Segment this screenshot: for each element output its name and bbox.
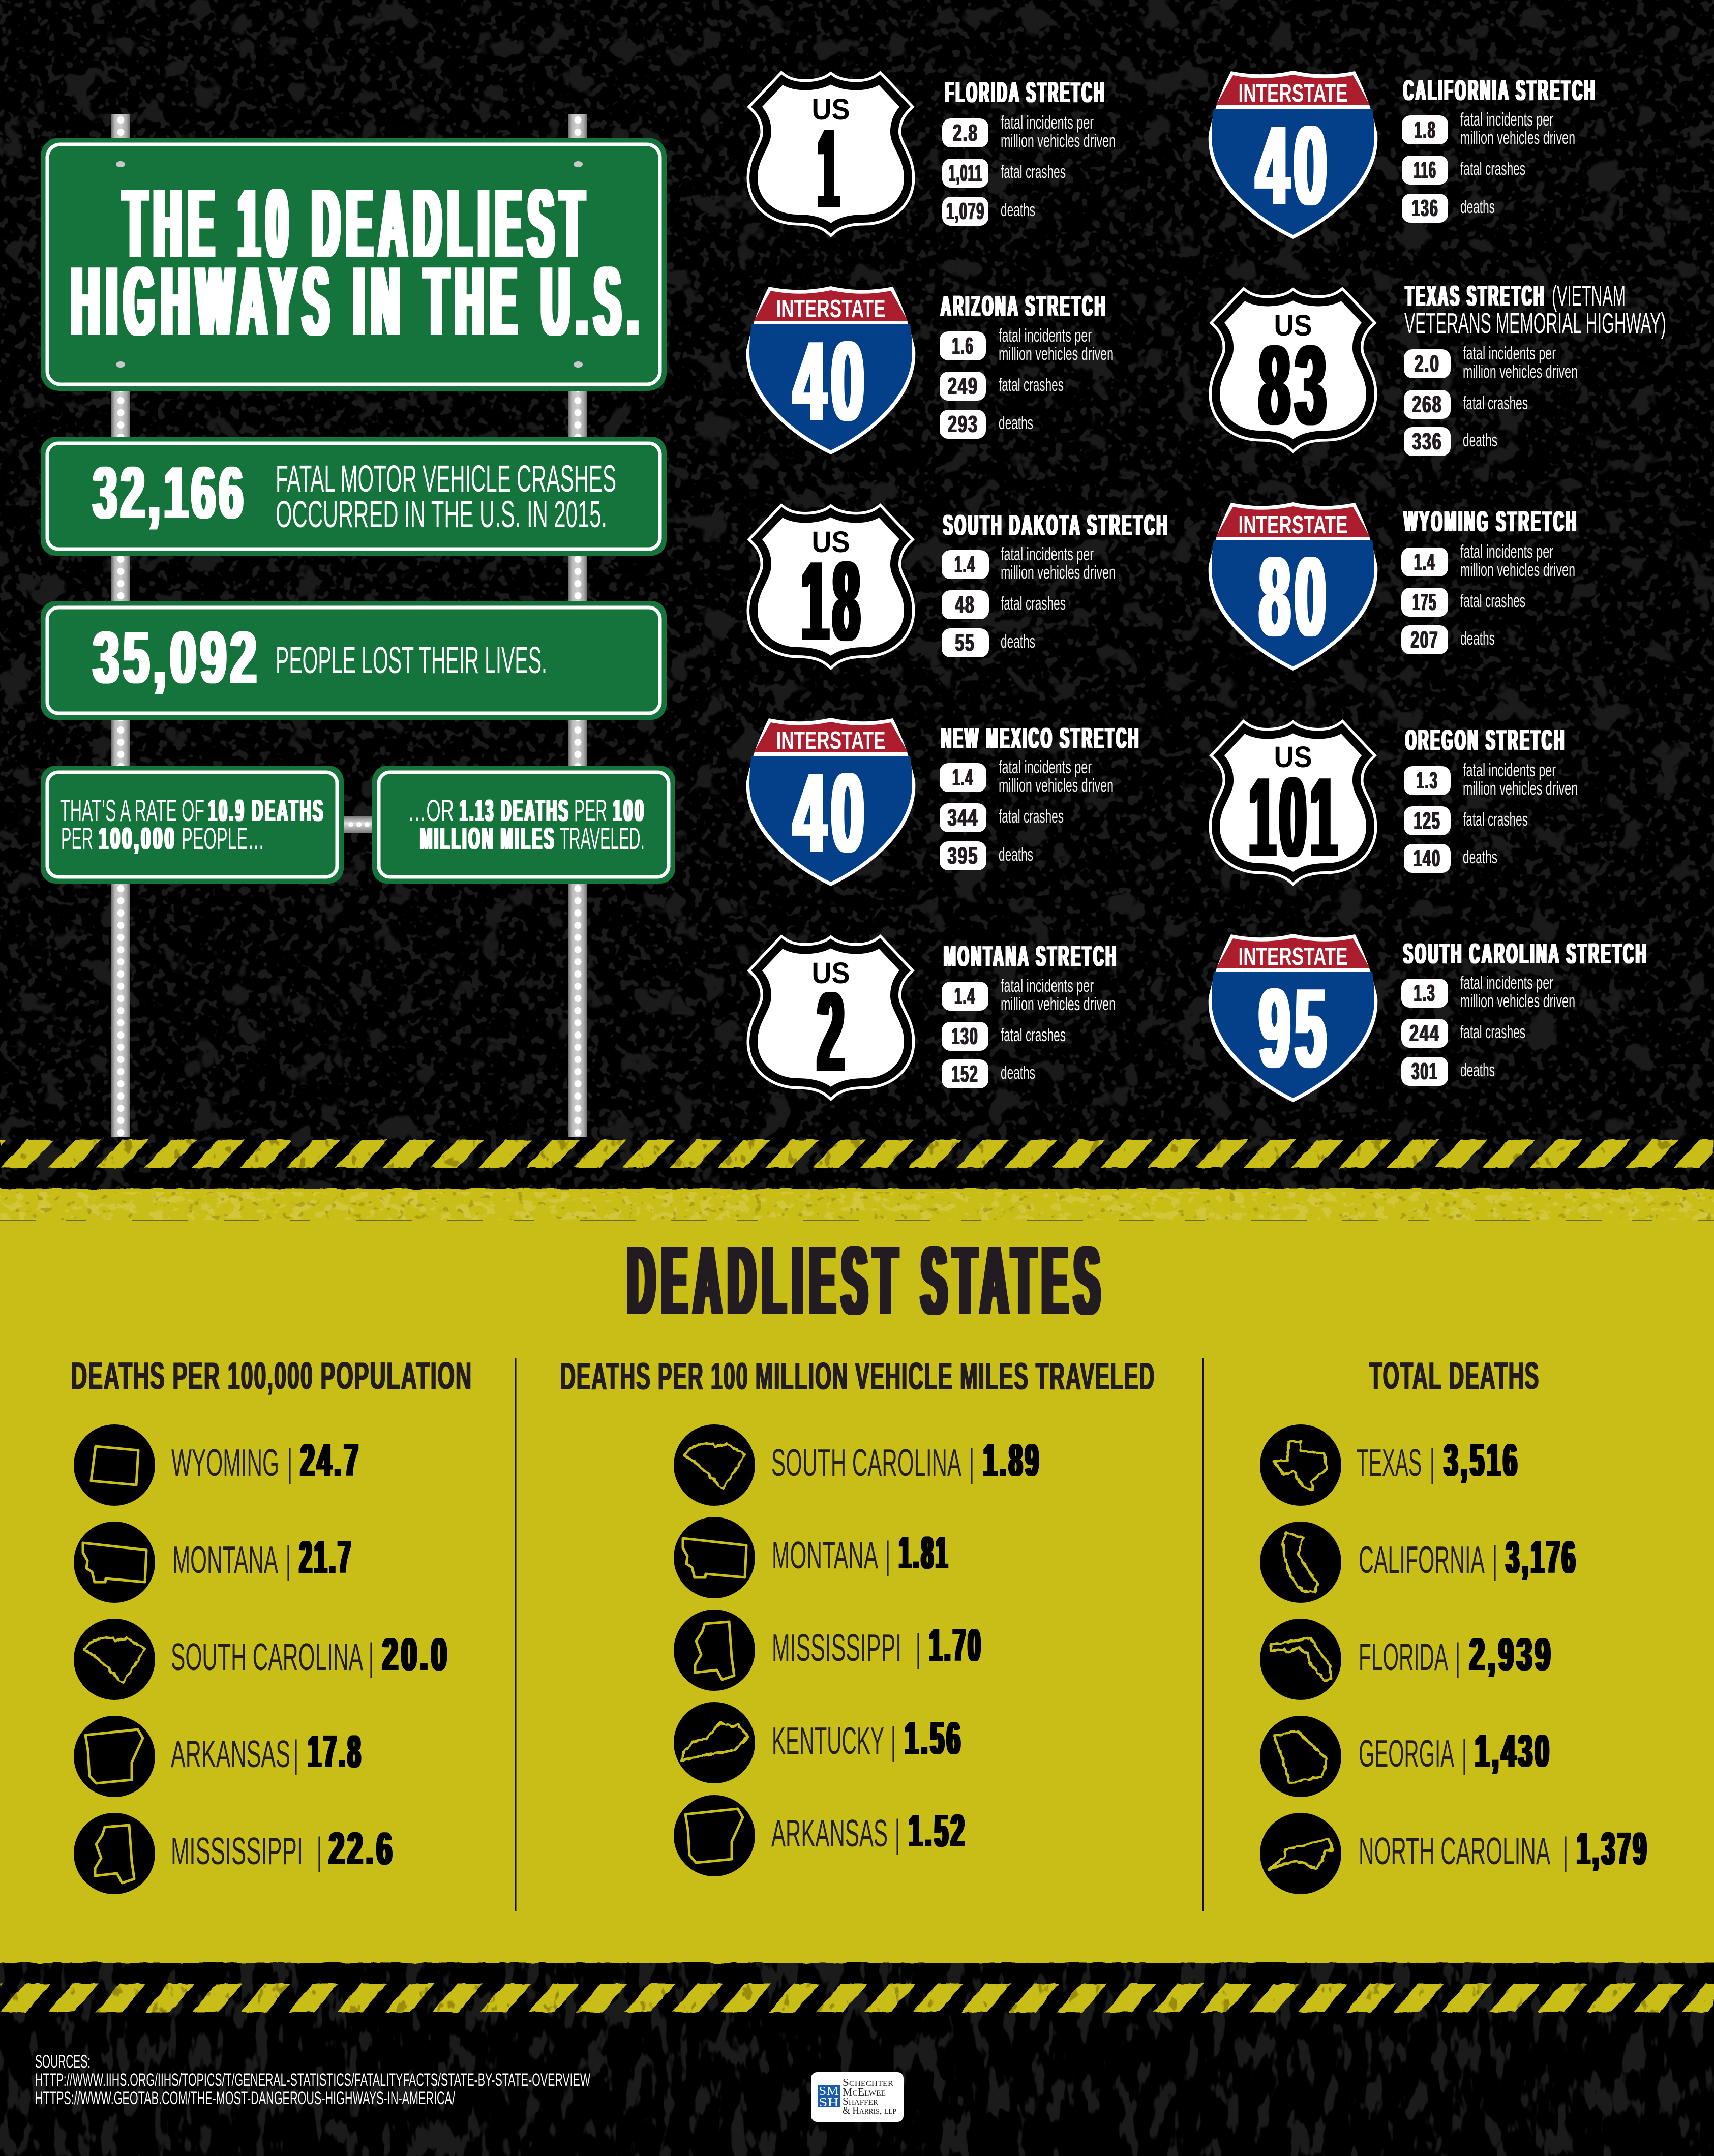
stats: 2.0 — [1415, 350, 1440, 377]
text: MONTANA STRETCH — [944, 940, 1118, 973]
shield: I-95: 95 — [1259, 965, 1331, 1091]
divider right — [1202, 1358, 1204, 1911]
logo: Schechter McElwee Shaffer & Harris: Schechter — [843, 2076, 893, 2088]
stats: 130 — [952, 1023, 978, 1049]
stats: million vehicles driven — [1460, 127, 1575, 148]
sign post: left — [111, 114, 130, 1137]
row: South Carolina — [74, 1619, 450, 1700]
row: Texas — [1260, 1424, 1520, 1506]
shield: US 1 — [754, 80, 908, 232]
stats: 140 — [1414, 845, 1441, 871]
stats — [942, 975, 1116, 1088]
column: total deaths — [1260, 1354, 1649, 1894]
stats: fatal crashes — [999, 374, 1064, 395]
row: Georgia: 1,430 — [1475, 1726, 1552, 1777]
miles text: 1.13 DEATHS — [460, 794, 570, 828]
column: deaths per 100 million vehicle miles traveled — [560, 1355, 1155, 1876]
stats: fatal incidents per — [1463, 343, 1556, 363]
row: Mississippi: | — [916, 1626, 921, 1669]
crashes number: 32,166 — [93, 451, 247, 534]
row: Arkansas: ARKANSAS — [771, 1812, 888, 1855]
stats: 301 — [1411, 1058, 1438, 1084]
stats — [1404, 343, 1578, 456]
stats — [940, 325, 1114, 439]
shield: I-40 — [1209, 71, 1377, 239]
row: Montana: MONTANA — [772, 1534, 878, 1576]
sign post: right — [568, 114, 587, 1137]
highway: I-40 New Mexico — [746, 718, 1140, 886]
stats: deaths — [1460, 196, 1495, 217]
shield: US 1: US — [811, 93, 850, 126]
small sign: rate per population: 10.9 DEATHS — [208, 794, 325, 828]
highway: I-40 Arizona — [746, 286, 1114, 454]
row: North Carolina: | — [1563, 1830, 1568, 1872]
stats: million vehicles driven — [1463, 361, 1578, 382]
shield: US 83 — [1216, 296, 1370, 448]
stats: 207 — [1410, 626, 1439, 653]
stats: fatal incidents per — [1463, 760, 1556, 780]
row: Arkansas: 17.8 — [308, 1726, 363, 1777]
row: Wyoming: WYOMING — [171, 1441, 279, 1484]
row: Arkansas: | — [293, 1733, 298, 1775]
row: California: 3,176 — [1506, 1532, 1578, 1583]
stats: 344 — [948, 804, 978, 831]
row: Mississippi — [674, 1610, 983, 1691]
sources: HTTP://WWW.IIHS.ORG/IIHS/TOPICS/T/GENERAL-STATISTICS/FATALITYFACTS/STATE-BY-STATE-OVERVIEW — [35, 2070, 590, 2090]
row: Montana — [674, 1517, 950, 1598]
highway: US 101 Oregon — [1216, 724, 1578, 880]
row: South Carolina: | — [369, 1635, 374, 1678]
stats: 249 — [948, 373, 978, 399]
row: Texas: TEXAS — [1357, 1441, 1422, 1484]
stats: 1.4 — [1414, 549, 1435, 575]
stats: fatal incidents per — [1460, 972, 1553, 993]
stats: 55 — [955, 629, 975, 656]
shield: I-40 — [746, 286, 915, 454]
stats: fatal crashes — [1463, 809, 1528, 830]
row: Georgia: | — [1462, 1732, 1467, 1775]
stats: deaths — [999, 412, 1033, 433]
shield: I-40: 40 — [1256, 103, 1332, 229]
row: Florida: FLORIDA — [1359, 1635, 1448, 1678]
column: deaths per 100 million vehicle miles traveled: 1.81 — [899, 1528, 950, 1578]
shield: I-40: INTERSTATE — [776, 295, 886, 323]
row: Mississippi: | — [317, 1830, 322, 1872]
stats: million vehicles driven — [1463, 778, 1578, 799]
shield: US 101 — [1216, 728, 1370, 880]
stats: fatal crashes — [999, 806, 1064, 827]
stats: 48 — [955, 591, 975, 618]
hazard stripes: bottom — [0, 1984, 1714, 2012]
highway: I-80 Wyoming — [1209, 502, 1578, 671]
stats: 2.8 — [953, 119, 978, 146]
shield: I-40: 40 — [793, 750, 869, 876]
stats: fatal crashes — [1460, 590, 1525, 611]
stats: fatal crashes — [1460, 1021, 1525, 1042]
stats: 1,011 — [949, 160, 982, 186]
column heading: TOTAL DEATHS — [1369, 1354, 1540, 1397]
highway: I-95 South Carolina — [1209, 934, 1648, 1102]
row: Georgia: GEORGIA — [1359, 1732, 1454, 1775]
row: South Carolina: | — [969, 1441, 974, 1484]
heading — [1404, 280, 1666, 340]
row: Arkansas: ARKANSAS — [171, 1733, 290, 1775]
row: Texas: 3,516 — [1444, 1435, 1520, 1486]
stats: 1.4 — [954, 983, 976, 1009]
stats: million vehicles driven — [1460, 559, 1575, 580]
shield: US 2: 2 — [818, 969, 844, 1095]
yellow panel: deadliest states — [0, 1189, 1714, 1963]
small sign: rate per miles — [372, 766, 675, 884]
column heading: DEATHS PER 100,000 POPULATION — [71, 1354, 472, 1397]
row: Kentucky: | — [891, 1719, 896, 1762]
highway: US 83 Texas — [1216, 280, 1666, 456]
row: Arkansas: | — [895, 1812, 900, 1855]
stats: 1.8 — [1415, 116, 1436, 143]
stats: fatal incidents per — [1460, 109, 1553, 130]
highway: US 2 Montana — [754, 940, 1118, 1095]
row: North Carolina: 1,379 — [1577, 1824, 1649, 1874]
row: Kentucky — [674, 1702, 963, 1783]
stats — [942, 543, 1116, 657]
column: deaths per 100,000 population: 21.7 — [299, 1532, 353, 1583]
shield: US 1: 1 — [818, 106, 838, 232]
shield: I-95: INTERSTATE — [1239, 943, 1347, 970]
row: Kentucky: KENTUCKY — [772, 1719, 884, 1762]
stats: fatal incidents per — [1460, 541, 1553, 562]
rate text: PER — [61, 822, 93, 856]
stats: deaths — [1463, 430, 1497, 450]
stats: million vehicles driven — [999, 775, 1114, 796]
miles text: 100 — [613, 794, 646, 828]
sources: SOURCES: — [35, 2052, 91, 2072]
stats: fatal crashes — [1001, 593, 1066, 614]
shield: US 83: US — [1274, 309, 1312, 342]
stats — [942, 112, 1116, 226]
row: Mississippi: 22.6 — [329, 1824, 395, 1874]
stats: deaths — [1001, 199, 1035, 220]
stats: fatal crashes — [1460, 158, 1525, 179]
row: Arkansas — [74, 1716, 363, 1797]
column: deaths per 100 million vehicle miles traveled: 1.70 — [929, 1620, 983, 1671]
heading: TEXAS STRETCH — [1405, 280, 1546, 312]
row: Montana — [74, 1522, 353, 1603]
row: California — [1260, 1522, 1578, 1603]
stat sign: crashes — [41, 437, 667, 556]
stats: deaths — [1460, 1059, 1495, 1080]
row: South Carolina — [674, 1424, 1041, 1506]
stats: 395 — [948, 842, 978, 869]
stats: 136 — [1411, 195, 1439, 221]
stats: million vehicles driven — [1001, 130, 1116, 151]
column heading: DEATHS PER 100 MILLION VEHICLE MILES TRAVELED — [560, 1355, 1155, 1398]
logo: Schechter McElwee Shaffer & Harris — [811, 2072, 904, 2122]
highway: US 18 South Dakota — [754, 509, 1169, 664]
connector bar between small signs — [341, 816, 376, 833]
stats: deaths — [1463, 846, 1497, 867]
row: Mississippi — [74, 1813, 395, 1894]
stats: deaths — [1460, 628, 1495, 649]
row: Wyoming: 24.7 — [300, 1435, 361, 1486]
stats: fatal incidents per — [999, 756, 1092, 777]
row: South Carolina: SOUTH CAROLINA — [171, 1635, 363, 1678]
highway: I-40 Arizona: ARIZONA STRETCH — [941, 290, 1107, 322]
text: NEW MEXICO STRETCH — [941, 722, 1140, 754]
row: Florida: 2,939 — [1469, 1629, 1553, 1680]
shield: US 2: US — [811, 957, 850, 990]
crashes description: FATAL MOTOR VEHICLE CRASHES — [276, 458, 616, 500]
row: Montana: | — [885, 1534, 890, 1576]
main title sign — [41, 138, 667, 391]
logo: Schechter McElwee Shaffer & Harris: SM — [819, 2085, 839, 2098]
stats: fatal crashes — [1463, 392, 1528, 413]
stats: million vehicles driven — [999, 343, 1114, 364]
stats: fatal incidents per — [1001, 543, 1094, 564]
miles text: PER — [574, 794, 607, 828]
stats: 268 — [1412, 391, 1442, 417]
logo: Schechter McElwee Shaffer & Harris: SH — [819, 2096, 839, 2109]
stats: fatal incidents per — [1001, 975, 1094, 996]
stats: 293 — [948, 411, 978, 437]
stats: 152 — [952, 1060, 978, 1087]
shield: I-40: 40 — [793, 318, 869, 444]
stat sign: deaths — [41, 601, 667, 720]
row: South Carolina: 20.0 — [382, 1629, 450, 1680]
shield: I-80: INTERSTATE — [1239, 511, 1347, 539]
row: Arkansas: 1.52 — [909, 1806, 967, 1857]
row: California: | — [1492, 1538, 1497, 1581]
shield: US 2 — [754, 944, 908, 1095]
shield: I-40 — [746, 718, 915, 886]
row: Mississippi: MISSISSIPPI — [171, 1830, 303, 1872]
stats — [940, 756, 1114, 870]
row: Arkansas — [674, 1795, 967, 1876]
text: THE 10 DEADLIEST — [124, 168, 591, 278]
row: Wyoming: | — [287, 1441, 292, 1484]
stats: 1.3 — [1417, 767, 1438, 794]
miles text: MILLION MILES — [420, 822, 556, 856]
stats: deaths — [1001, 1062, 1035, 1083]
miles text: TRAVELED. — [560, 822, 645, 856]
crashes description: OCCURRED IN THE U.S. IN 2015. — [276, 493, 607, 535]
shield: US 83: 83 — [1259, 322, 1331, 448]
stats: 1.3 — [1414, 980, 1436, 1006]
row: Texas: | — [1430, 1441, 1435, 1484]
rate text: 100,000 — [99, 822, 176, 856]
shield: I-95 — [1209, 934, 1377, 1102]
hazard stripes: top — [0, 1140, 1714, 1168]
row: Montana: MONTANA — [172, 1538, 278, 1581]
row: Georgia — [1260, 1716, 1552, 1797]
stats: deaths — [1001, 631, 1035, 652]
stats: fatal incidents per — [999, 325, 1092, 346]
stats: 116 — [1414, 157, 1437, 183]
logo: Schechter McElwee Shaffer & Harris: & Harris, llp — [843, 2104, 896, 2116]
stats: 244 — [1409, 1020, 1440, 1046]
row: Montana: | — [286, 1538, 291, 1581]
stats: million vehicles driven — [1460, 990, 1575, 1011]
row: California: CALIFORNIA — [1359, 1538, 1485, 1581]
highway: US 1 Florida — [754, 76, 1116, 232]
row: Mississippi: MISSISSIPPI — [772, 1626, 901, 1669]
stats: 1.4 — [954, 551, 976, 578]
stats — [1401, 541, 1575, 654]
shield: US 18: US — [811, 526, 850, 559]
deaths number: 35,092 — [93, 616, 260, 699]
logo: Schechter McElwee Shaffer & Harris: McElwee — [843, 2086, 886, 2098]
stats: deaths — [999, 844, 1033, 865]
stats — [1404, 760, 1578, 873]
rate text: THAT’S A RATE OF — [60, 794, 204, 828]
row: Florida: | — [1455, 1635, 1460, 1678]
miles text: …OR — [408, 794, 454, 828]
stats — [1402, 109, 1575, 223]
shield: I-40: INTERSTATE — [1239, 80, 1347, 107]
stats: million vehicles driven — [1001, 993, 1116, 1014]
stats — [1401, 972, 1575, 1086]
row: North Carolina — [1260, 1813, 1649, 1894]
heading: (VIETNAM — [1552, 280, 1626, 312]
stats: 175 — [1412, 589, 1437, 615]
text: HIGHWAYS IN THE U.S. — [71, 246, 645, 356]
logo: Schechter McElwee Shaffer & Harris: Shaffer — [843, 2095, 878, 2107]
stats: million vehicles driven — [1001, 562, 1116, 583]
text: SOUTH DAKOTA STRETCH — [943, 509, 1169, 541]
stats: fatal crashes — [1001, 161, 1066, 182]
row: North Carolina: NORTH CAROLINA — [1359, 1830, 1550, 1872]
row: South Carolina: 1.89 — [983, 1435, 1041, 1486]
stats: 1.6 — [952, 332, 974, 359]
rate text — [60, 794, 325, 856]
divider left — [515, 1358, 517, 1911]
sources — [35, 2052, 590, 2108]
shield: US 101: 101 — [1249, 754, 1341, 880]
stats: 1,079 — [946, 198, 985, 224]
shield: I-80 — [1209, 502, 1377, 671]
row: South Carolina: SOUTH CAROLINA — [771, 1441, 961, 1484]
stats: 125 — [1414, 807, 1441, 834]
stats: fatal incidents per — [1001, 112, 1094, 133]
rate text: PEOPLE… — [182, 822, 264, 856]
small sign: rate per population — [41, 766, 344, 884]
highway: US 1 Florida: FLORIDA STRETCH — [945, 76, 1106, 109]
shield: US 101: US — [1274, 741, 1312, 774]
stats: 1.4 — [952, 764, 974, 791]
shield: US 18: 18 — [801, 538, 864, 664]
deaths description: PEOPLE LOST THEIR LIVES. — [276, 639, 547, 681]
shield: US 18 — [754, 512, 908, 664]
row: Florida — [1260, 1619, 1553, 1700]
stats: 336 — [1412, 428, 1442, 454]
crashes description — [276, 458, 616, 535]
miles text — [408, 794, 646, 856]
shield: I-80: 80 — [1259, 534, 1331, 660]
highway: I-40 California — [1209, 71, 1597, 239]
shield: I-40: INTERSTATE — [776, 727, 886, 754]
column: deaths per 100,000 population — [71, 1354, 472, 1894]
stats: fatal crashes — [1001, 1024, 1066, 1045]
sources: HTTPS://WWW.GEOTAB.COM/THE-MOST-DANGEROUS-HIGHWAYS-IN-AMERICA/ — [35, 2088, 455, 2108]
row: Wyoming — [74, 1424, 361, 1506]
title text — [71, 168, 645, 356]
row: Kentucky: 1.56 — [905, 1713, 963, 1764]
